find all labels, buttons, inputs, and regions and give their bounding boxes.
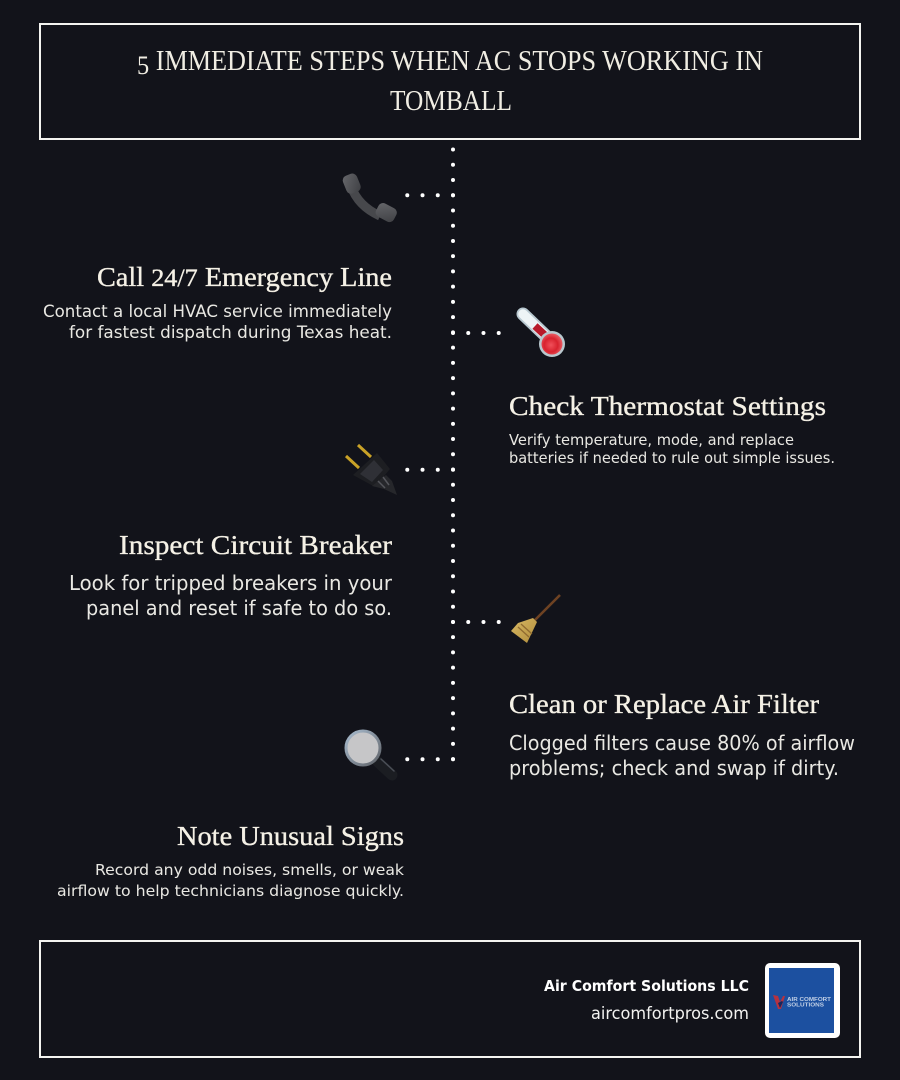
step 4: clean air filter: Clogged filters cause 80% of airflow [509, 731, 855, 755]
step 3: inspect circuit breaker: Inspect Circuit Breaker [119, 530, 392, 560]
step 5: note unusual signs: Note Unusual Signs [177, 821, 404, 851]
step 5: note unusual signs [57, 821, 404, 900]
icon: broom [511, 595, 560, 643]
step 4: clean air filter: problems; check and swap if dirty. [509, 756, 839, 780]
step 2: check thermostat: batteries if needed to rule out simple issues. [509, 449, 835, 467]
step 1: call emergency line: Call 24/7 Emergency Line [97, 262, 392, 292]
step 4: clean air filter: Clean or Replace Air Filter [509, 689, 819, 719]
company logo: SOLUTIONS [787, 1002, 824, 1008]
company name: Air Comfort Solutions LLC [544, 977, 749, 995]
dotted timeline [405, 150, 501, 760]
company logo [765, 963, 840, 1038]
company logo: AIR COMFORT [787, 997, 832, 1003]
step 1: call emergency line: for fastest dispatch during Texas heat. [69, 323, 392, 343]
title text: TOMBALL [390, 86, 512, 117]
icon: telephone [341, 172, 399, 224]
website: aircomfortpros.com [591, 1004, 749, 1023]
step 5: note unusual signs: airflow to help technicians diagnose quickly. [57, 882, 404, 900]
step 1: call emergency line [43, 262, 392, 343]
title banner [40, 24, 860, 139]
title text [137, 46, 763, 117]
step 2: check thermostat: Verify temperature, mode, and replace [509, 431, 794, 449]
step 2: check thermostat: Check Thermostat Settings [509, 391, 826, 421]
step 4: clean air filter [509, 689, 855, 780]
step 3: inspect circuit breaker: panel and reset if safe to do so. [86, 596, 392, 620]
title text: IMMEDIATE STEPS WHEN AC STOPS WORKING IN [149, 46, 763, 77]
step 2: check thermostat [509, 391, 835, 467]
step 5: note unusual signs: Record any odd noises, smells, or weak [95, 861, 404, 879]
step 3: inspect circuit breaker [69, 530, 393, 620]
icon: electric plug [346, 445, 397, 495]
icon: thermometer [523, 314, 565, 357]
step 3: inspect circuit breaker: Look for tripped breakers in your [69, 571, 393, 595]
step 1: call emergency line: Contact a local HVAC service immediately [43, 302, 392, 322]
title text: 5 [137, 51, 149, 80]
icon: magnifying glass [346, 731, 394, 775]
footer banner [40, 941, 860, 1057]
